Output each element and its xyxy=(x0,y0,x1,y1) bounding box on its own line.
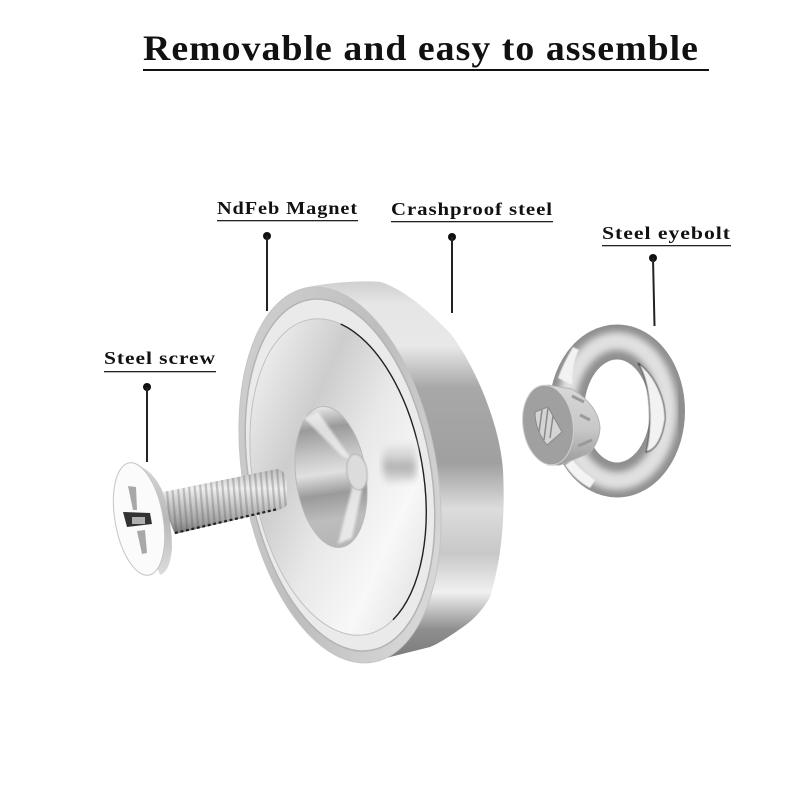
magnet xyxy=(211,271,504,679)
screw shaft xyxy=(163,469,287,534)
phillips recess xyxy=(123,486,152,554)
magnet side wall xyxy=(300,281,504,662)
center hole xyxy=(345,453,369,491)
label: Steel screw: Steel screw xyxy=(104,348,216,368)
countersink xyxy=(286,402,376,552)
label: Steel screw xyxy=(104,348,216,462)
label: Steel eyebolt xyxy=(602,223,731,326)
label: NdFeb Magnet: NdFeb Magnet xyxy=(217,198,358,218)
screw head rim xyxy=(128,463,172,575)
screw shaft reflection xyxy=(382,441,416,484)
steel screw xyxy=(105,459,287,579)
magnet front rim xyxy=(211,271,469,679)
eyebolt thread stub xyxy=(535,407,562,445)
label: Crashproof steel xyxy=(391,199,553,313)
screw head xyxy=(105,459,173,579)
eyebolt ring base xyxy=(566,342,668,480)
steel eyebolt xyxy=(518,341,668,488)
ring highlights xyxy=(638,363,665,452)
label: NdFeb Magnet xyxy=(217,198,358,311)
label: Crashproof steel: Crashproof steel xyxy=(391,199,553,219)
title: Removable and easy to assemble xyxy=(143,28,699,68)
label: Steel eyebolt: Steel eyebolt xyxy=(602,223,731,243)
collar engraving xyxy=(572,396,592,446)
eyebolt face xyxy=(518,382,578,468)
eyebolt collar xyxy=(548,385,600,465)
eyebolt ring tube shading xyxy=(566,341,668,481)
thread roots xyxy=(175,509,278,533)
magnet inner face xyxy=(227,305,449,649)
inner edge shadow arc xyxy=(227,305,449,649)
